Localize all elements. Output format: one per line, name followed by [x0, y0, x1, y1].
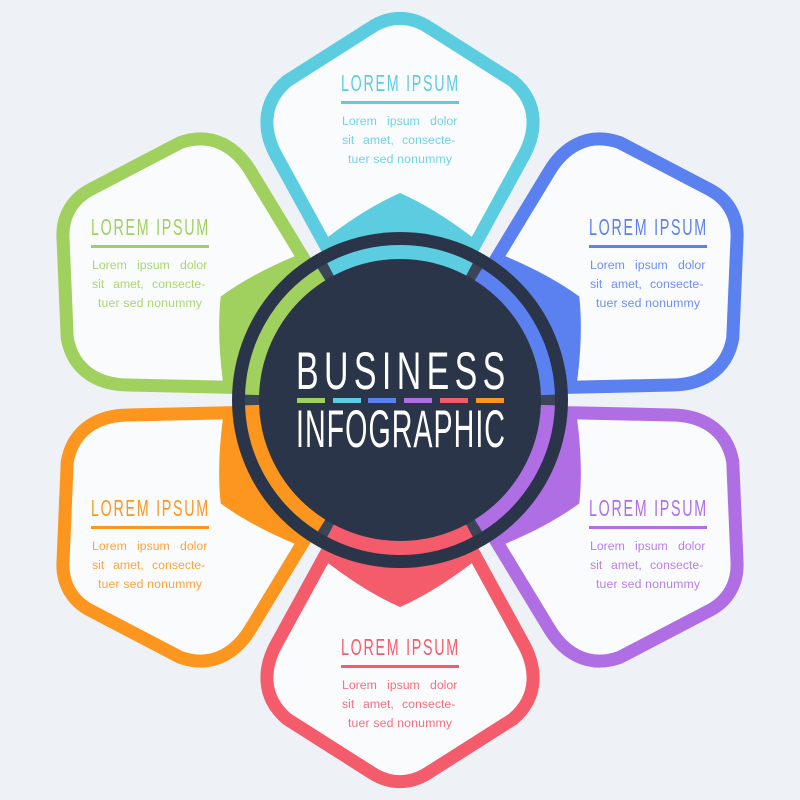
segmented colour ring	[237, 252, 563, 548]
orange body text: tuer sed nonummy	[98, 577, 203, 591]
purple body text: sit	[590, 558, 603, 572]
blue text block	[589, 216, 707, 310]
cyan body text: amet,	[363, 133, 394, 147]
red text block	[341, 636, 459, 730]
orange body text: amet,	[113, 558, 144, 572]
red body text: tuer sed nonummy	[348, 716, 453, 730]
cyan body text: Lorem	[342, 114, 377, 128]
blue petal outline	[333, 94, 797, 515]
cyan text block	[341, 72, 459, 166]
cyan body text: dolor	[430, 114, 457, 128]
blue tab	[451, 234, 615, 412]
purple text block	[589, 497, 707, 591]
purple body text: consecte-	[650, 558, 703, 572]
orange body text: dolor	[180, 539, 207, 553]
blue body text: tuer sed nonummy	[596, 296, 701, 310]
red body text: sit	[342, 697, 355, 711]
red body text: amet,	[363, 697, 394, 711]
cyan underline	[341, 101, 459, 104]
green tab	[185, 234, 349, 412]
red underline	[341, 665, 459, 668]
orange petal outline	[3, 285, 467, 706]
cyan body text: consecte-	[402, 133, 455, 147]
red tab	[328, 500, 472, 607]
green underline	[91, 245, 209, 248]
central hub	[232, 232, 568, 568]
green body text: sit	[92, 277, 105, 291]
red body text: Lorem	[342, 678, 377, 692]
green body text: dolor	[180, 258, 207, 272]
dark circle	[232, 232, 568, 568]
red body text: consecte-	[402, 697, 455, 711]
orange body text: sit	[92, 558, 105, 572]
red body text: ipsum	[387, 678, 420, 692]
title: BUSINESS: BUSINESS	[296, 343, 505, 401]
green body text: amet,	[113, 277, 144, 291]
orange body text: Lorem	[92, 539, 127, 553]
orange body text: ipsum	[137, 539, 170, 553]
red petal outline	[267, 400, 533, 782]
purple heading: LOREM IPSUM	[589, 497, 706, 522]
green body text: ipsum	[137, 258, 170, 272]
blue body text: dolor	[678, 258, 705, 272]
orange underline	[91, 526, 209, 529]
purple body text: Lorem	[590, 539, 625, 553]
title: INFOGRAPHIC: INFOGRAPHIC	[296, 400, 505, 459]
cyan petal outline	[267, 18, 533, 400]
panel: bottom red	[267, 400, 533, 782]
blue body text: sit	[590, 277, 603, 291]
purple underline	[589, 526, 707, 529]
panel: lower right purple	[333, 285, 797, 706]
purple body text: ipsum	[635, 539, 668, 553]
blue body text: consecte-	[650, 277, 703, 291]
blue underline	[589, 245, 707, 248]
green petal outline	[3, 94, 467, 515]
cyan body text: tuer sed nonummy	[348, 152, 453, 166]
blue body text: ipsum	[635, 258, 668, 272]
red body text: dolor	[430, 678, 457, 692]
purple tab	[451, 388, 615, 566]
orange heading: LOREM IPSUM	[91, 497, 208, 522]
orange text block	[91, 497, 209, 591]
panel: upper left green	[3, 94, 467, 515]
panel: lower left orange	[3, 285, 467, 706]
green heading: LOREM IPSUM	[91, 216, 208, 241]
green text block	[91, 216, 209, 310]
red heading: LOREM IPSUM	[341, 636, 458, 661]
blue heading: LOREM IPSUM	[589, 216, 706, 241]
cyan heading: LOREM IPSUM	[341, 72, 458, 97]
orange body text: consecte-	[152, 558, 205, 572]
panel: upper right blue	[333, 94, 797, 515]
purple body text: tuer sed nonummy	[596, 577, 701, 591]
blue body text: Lorem	[590, 258, 625, 272]
cyan body text: ipsum	[387, 114, 420, 128]
cyan tab	[328, 193, 472, 300]
orange tab	[185, 388, 349, 566]
colour bars divider	[297, 398, 504, 403]
cyan body text: sit	[342, 133, 355, 147]
green body text: Lorem	[92, 258, 127, 272]
purple body text: dolor	[678, 539, 705, 553]
purple body text: amet,	[611, 558, 642, 572]
green body text: tuer sed nonummy	[98, 296, 203, 310]
blue body text: amet,	[611, 277, 642, 291]
panel: top cyan	[267, 18, 533, 400]
green body text: consecte-	[152, 277, 205, 291]
purple petal outline	[333, 285, 797, 706]
